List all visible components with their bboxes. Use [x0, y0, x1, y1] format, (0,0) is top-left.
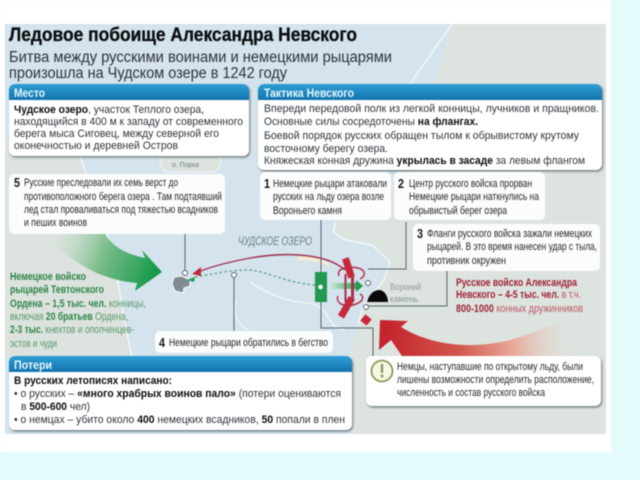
icon: German wedge — [315, 272, 363, 302]
text: tactics: Впереди передовой полк из легкой конницы, лучников и пращников. — [264, 103, 599, 115]
heading: losses: Потери — [14, 360, 52, 372]
callout: step 5: Русские преследовали их семь верст до — [24, 177, 178, 189]
text: tactics: восточному берегу озера. — [264, 143, 388, 155]
callout: warning — [366, 356, 601, 406]
label: Raven Stone: Вороний — [390, 282, 421, 293]
text: place: берега мыса Сиговец, между северной его — [14, 128, 219, 140]
battle map: lake label: ЧУДСКОЕ ОЗЕРО — [238, 234, 312, 248]
icon: Russian formation — [337, 257, 372, 326]
heading: place: Место — [14, 88, 45, 100]
panel: losses — [9, 356, 352, 430]
callout: step 1: 1 — [264, 176, 270, 191]
text: place: оконечностью и деревней Остров — [14, 140, 178, 152]
callout: step 5: 5 — [14, 175, 20, 190]
icon: Raven Stone — [367, 290, 388, 302]
text: place: находящийся в 400 м к западу от современного — [14, 116, 243, 128]
text block: Russian army — [456, 277, 583, 315]
text block: German army: включая 20 братьев Ордена, — [10, 311, 128, 323]
text: warning: Немцы, наступавшие по открытому льду, были — [397, 361, 583, 373]
text: losses: В русских летописях написано: — [14, 375, 172, 387]
land: left shore — [5, 140, 132, 356]
text: warning — [397, 361, 594, 399]
callout: step 5 — [9, 174, 225, 234]
leader lines — [185, 220, 447, 356]
text block: Russian army: 800-1000 конных дружинников — [456, 303, 583, 315]
label: Porka: о. Порка — [172, 162, 199, 169]
text block: German army: рыцарей Тевтонского — [10, 284, 104, 296]
panel: place — [9, 84, 249, 156]
title: Ледовое побоище Александра Невского — [9, 25, 357, 46]
shoreline: central bay — [235, 282, 345, 330]
heading: tactics: Тактика Невского — [264, 88, 354, 100]
callout: step 4: Немецкие рыцари обратились в бегство — [169, 337, 328, 349]
callout: step 4: 4 — [159, 335, 166, 350]
callout: step 3: 3 — [417, 226, 423, 241]
text block: German army: Ордена – 1,5 тыс. чел. конницы, — [10, 298, 146, 310]
text: losses — [14, 375, 345, 426]
subtitle — [9, 49, 392, 82]
subtitle: Битва между русскими воинами и немецкими рыцарями — [9, 49, 392, 66]
text block: Russian army: Невского – 4-5 тыс. чел. в т.ч. — [456, 289, 581, 301]
callout: step 1 — [260, 172, 391, 220]
callout: step 2: 2 — [398, 176, 404, 191]
callout: step 3: Фланги русского войска зажали немецких — [427, 228, 592, 240]
callout: step 1: русских на льду озера возле — [273, 191, 384, 203]
label: Raven Stone — [390, 282, 421, 305]
icon: drowning site — [172, 270, 236, 293]
callout: step 3: противник окружен — [427, 255, 506, 267]
callout: step 5: лед стал проваливаться под тяжестью всадников — [24, 204, 218, 216]
arrow: German advance (green) — [45, 234, 162, 291]
text: tactics: Основные силы сосредоточены на флангах. — [264, 116, 478, 128]
callout: step 1: Немецкие рыцари атаковали — [273, 178, 387, 190]
text: place — [14, 104, 243, 152]
arrow: Russian attack (red) — [379, 318, 585, 356]
text: place: Чудское озеро, участок Теплого озера, — [14, 104, 204, 116]
callout: step 2: Немецкие рыцари наткнулись на — [409, 191, 540, 203]
callout: step 2: обрывистый берег озера — [409, 205, 508, 217]
callout: step 1: Вороньего камня — [273, 205, 342, 217]
land: right shore — [333, 24, 606, 434]
callout: step 2: Центр русского войска прорван — [409, 178, 532, 190]
text: losses: в 500-600 чел) — [21, 401, 90, 413]
text block: German army: 2-3 тыс. кнехтов и ополченцев- — [10, 324, 134, 336]
text: tactics — [264, 103, 599, 167]
battle map: retreat and pursuit lines — [192, 255, 345, 285]
label: Raven Stone: камень — [390, 294, 418, 305]
callout: step 2 — [394, 172, 545, 220]
text block: Russian army: Русское войско Александра — [456, 277, 578, 289]
text: warning: численность и состав русского войска — [397, 387, 546, 399]
callout: step 5: противоположного берега озера . Там подтаявший — [24, 191, 222, 203]
island: Porka — [160, 156, 221, 172]
icon: exclamation — [372, 360, 392, 382]
panel: tactics — [258, 84, 602, 170]
text block: German army: эстов и чуди — [10, 338, 57, 350]
marker: Raven Stone leaders — [364, 280, 370, 310]
text: losses: • о немцах – убито около 400 немецких всадников, 50 попали в плен — [14, 414, 345, 426]
text: tactics: Боевой порядок русских обращен тылом к обрывистому крутому — [264, 130, 579, 142]
callout: step 5: и пеших воинов — [24, 217, 87, 229]
subtitle: произошла на Чудском озере в 1242 году — [9, 65, 287, 82]
text: losses: • о русских – «много храбрых воинов пало» (потери оцениваются — [14, 388, 341, 400]
callout: step 3 — [413, 224, 600, 271]
callout: step 4 — [155, 331, 333, 353]
text block: German army — [10, 271, 146, 350]
text block: German army: Немецкое войско — [10, 271, 86, 283]
text: tactics: Княжеская конная дружина укрылась в засаде за левым флангом — [264, 155, 585, 167]
